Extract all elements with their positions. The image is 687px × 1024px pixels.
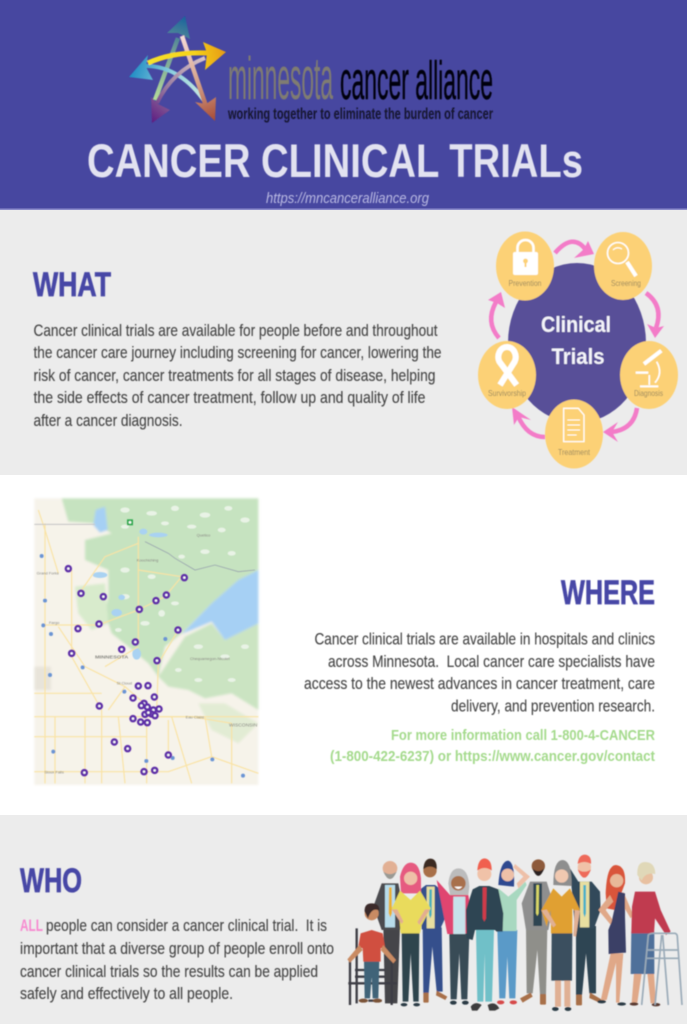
map place labels bbox=[37, 533, 257, 775]
panel: what bbox=[0, 210, 687, 475]
person: man in grey suit bbox=[520, 859, 553, 1005]
map: Minnesota trial locations bbox=[34, 498, 258, 785]
person: woman with blue hair bbox=[497, 861, 530, 1004]
logo wordmark: working together to eliminate the burden of cancer bbox=[227, 106, 493, 123]
person: woman with grey hair and pink jacket bbox=[437, 868, 474, 1005]
person: woman in orange sweater bbox=[541, 860, 580, 1011]
panel: who bbox=[0, 815, 687, 1024]
center label: Clinical bbox=[541, 312, 611, 337]
text block: who description: cancer clinical trials so the results can be applied bbox=[20, 962, 318, 981]
map place labels: St Cloud bbox=[117, 681, 132, 686]
logo wordmark: minnesota bbox=[228, 45, 333, 112]
text block: what description: after a cancer diagnosis. bbox=[34, 411, 182, 430]
map place labels: Chequamegon-Nicolet bbox=[190, 656, 231, 661]
center label bbox=[541, 312, 611, 369]
callout: contact information bbox=[330, 727, 655, 765]
website link: https://mncanceralliance.org bbox=[266, 190, 430, 207]
map place labels: Eau Claire bbox=[186, 714, 205, 719]
person: woman with pink hair and yellow top bbox=[392, 863, 431, 1006]
map place labels: WISCONSIN bbox=[229, 723, 257, 728]
person: child in wheelchair bbox=[347, 903, 397, 1005]
person: man with red beard bbox=[570, 855, 601, 1005]
map place labels: Fargo bbox=[49, 620, 60, 625]
text block: what description bbox=[34, 321, 442, 430]
text block: who description bbox=[20, 916, 334, 1003]
text block: who description: safely and effectively to all people. bbox=[20, 984, 233, 1003]
chart: clinical trials cycle bbox=[478, 232, 678, 468]
person: man in dark suit with beard bbox=[373, 861, 403, 1003]
person: elderly woman with walker bbox=[630, 862, 682, 1006]
arrows: cycle direction bbox=[488, 241, 664, 442]
map place labels: Quetico bbox=[197, 533, 211, 538]
step: screening bbox=[594, 232, 652, 300]
person: man in navy sweater with red tie bbox=[466, 858, 503, 1011]
text block: what description: the side effects of cancer treatment, follow up and quality of life bbox=[34, 388, 426, 407]
heading: who: WHO bbox=[20, 862, 82, 900]
step: prevention: Prevention bbox=[508, 278, 542, 288]
map place labels: Grand Forks bbox=[37, 570, 59, 575]
heading: where: WHERE bbox=[561, 574, 655, 612]
text block: who description: ALL bbox=[20, 916, 43, 935]
panel: header banner bbox=[0, 0, 687, 210]
step: prevention bbox=[496, 232, 554, 300]
person: man in blue suit bbox=[419, 859, 447, 1003]
map place labels: Koochiching bbox=[137, 558, 158, 563]
map markers bbox=[66, 566, 187, 775]
heading: what: WHAT bbox=[33, 266, 111, 304]
text block: who description: important that a diverse group of people enroll onto bbox=[20, 939, 334, 958]
map place labels: Sioux Falls bbox=[44, 770, 64, 775]
callout: contact information: (1-800-422-6237) or https://www.cancer.gov/contact bbox=[330, 748, 655, 765]
step: survivorship bbox=[478, 341, 536, 409]
illustration: diverse group of people bbox=[347, 855, 682, 1011]
text block: who description: people can consider a cancer clinical trial. It is bbox=[46, 916, 327, 935]
icon: five-arrow star logo mark bbox=[129, 16, 226, 123]
step: survivorship: Survivorship bbox=[488, 388, 526, 398]
step: screening: Screening bbox=[611, 278, 641, 288]
text block: what description: risk of cancer, cancer treatments for all stages of disease, helping bbox=[34, 366, 436, 385]
panel: where bbox=[0, 475, 687, 815]
person: woman with red hair and navy dress bbox=[597, 865, 633, 1006]
text block: what description: the cancer care journey including screening for cancer, lowering the bbox=[34, 343, 442, 362]
title: CANCER CLINICAL TRIALs bbox=[87, 134, 583, 187]
step: treatment: Treatment bbox=[558, 447, 591, 457]
step: treatment bbox=[545, 400, 603, 468]
text block: where description bbox=[304, 630, 655, 716]
text block: what description: Cancer clinical trials are available for people before and throughout bbox=[34, 321, 438, 340]
step: diagnosis: Diagnosis bbox=[634, 388, 663, 398]
center label: Trials bbox=[552, 344, 604, 369]
map place labels: MINNESOTA bbox=[95, 654, 129, 660]
step: diagnosis bbox=[620, 341, 678, 409]
